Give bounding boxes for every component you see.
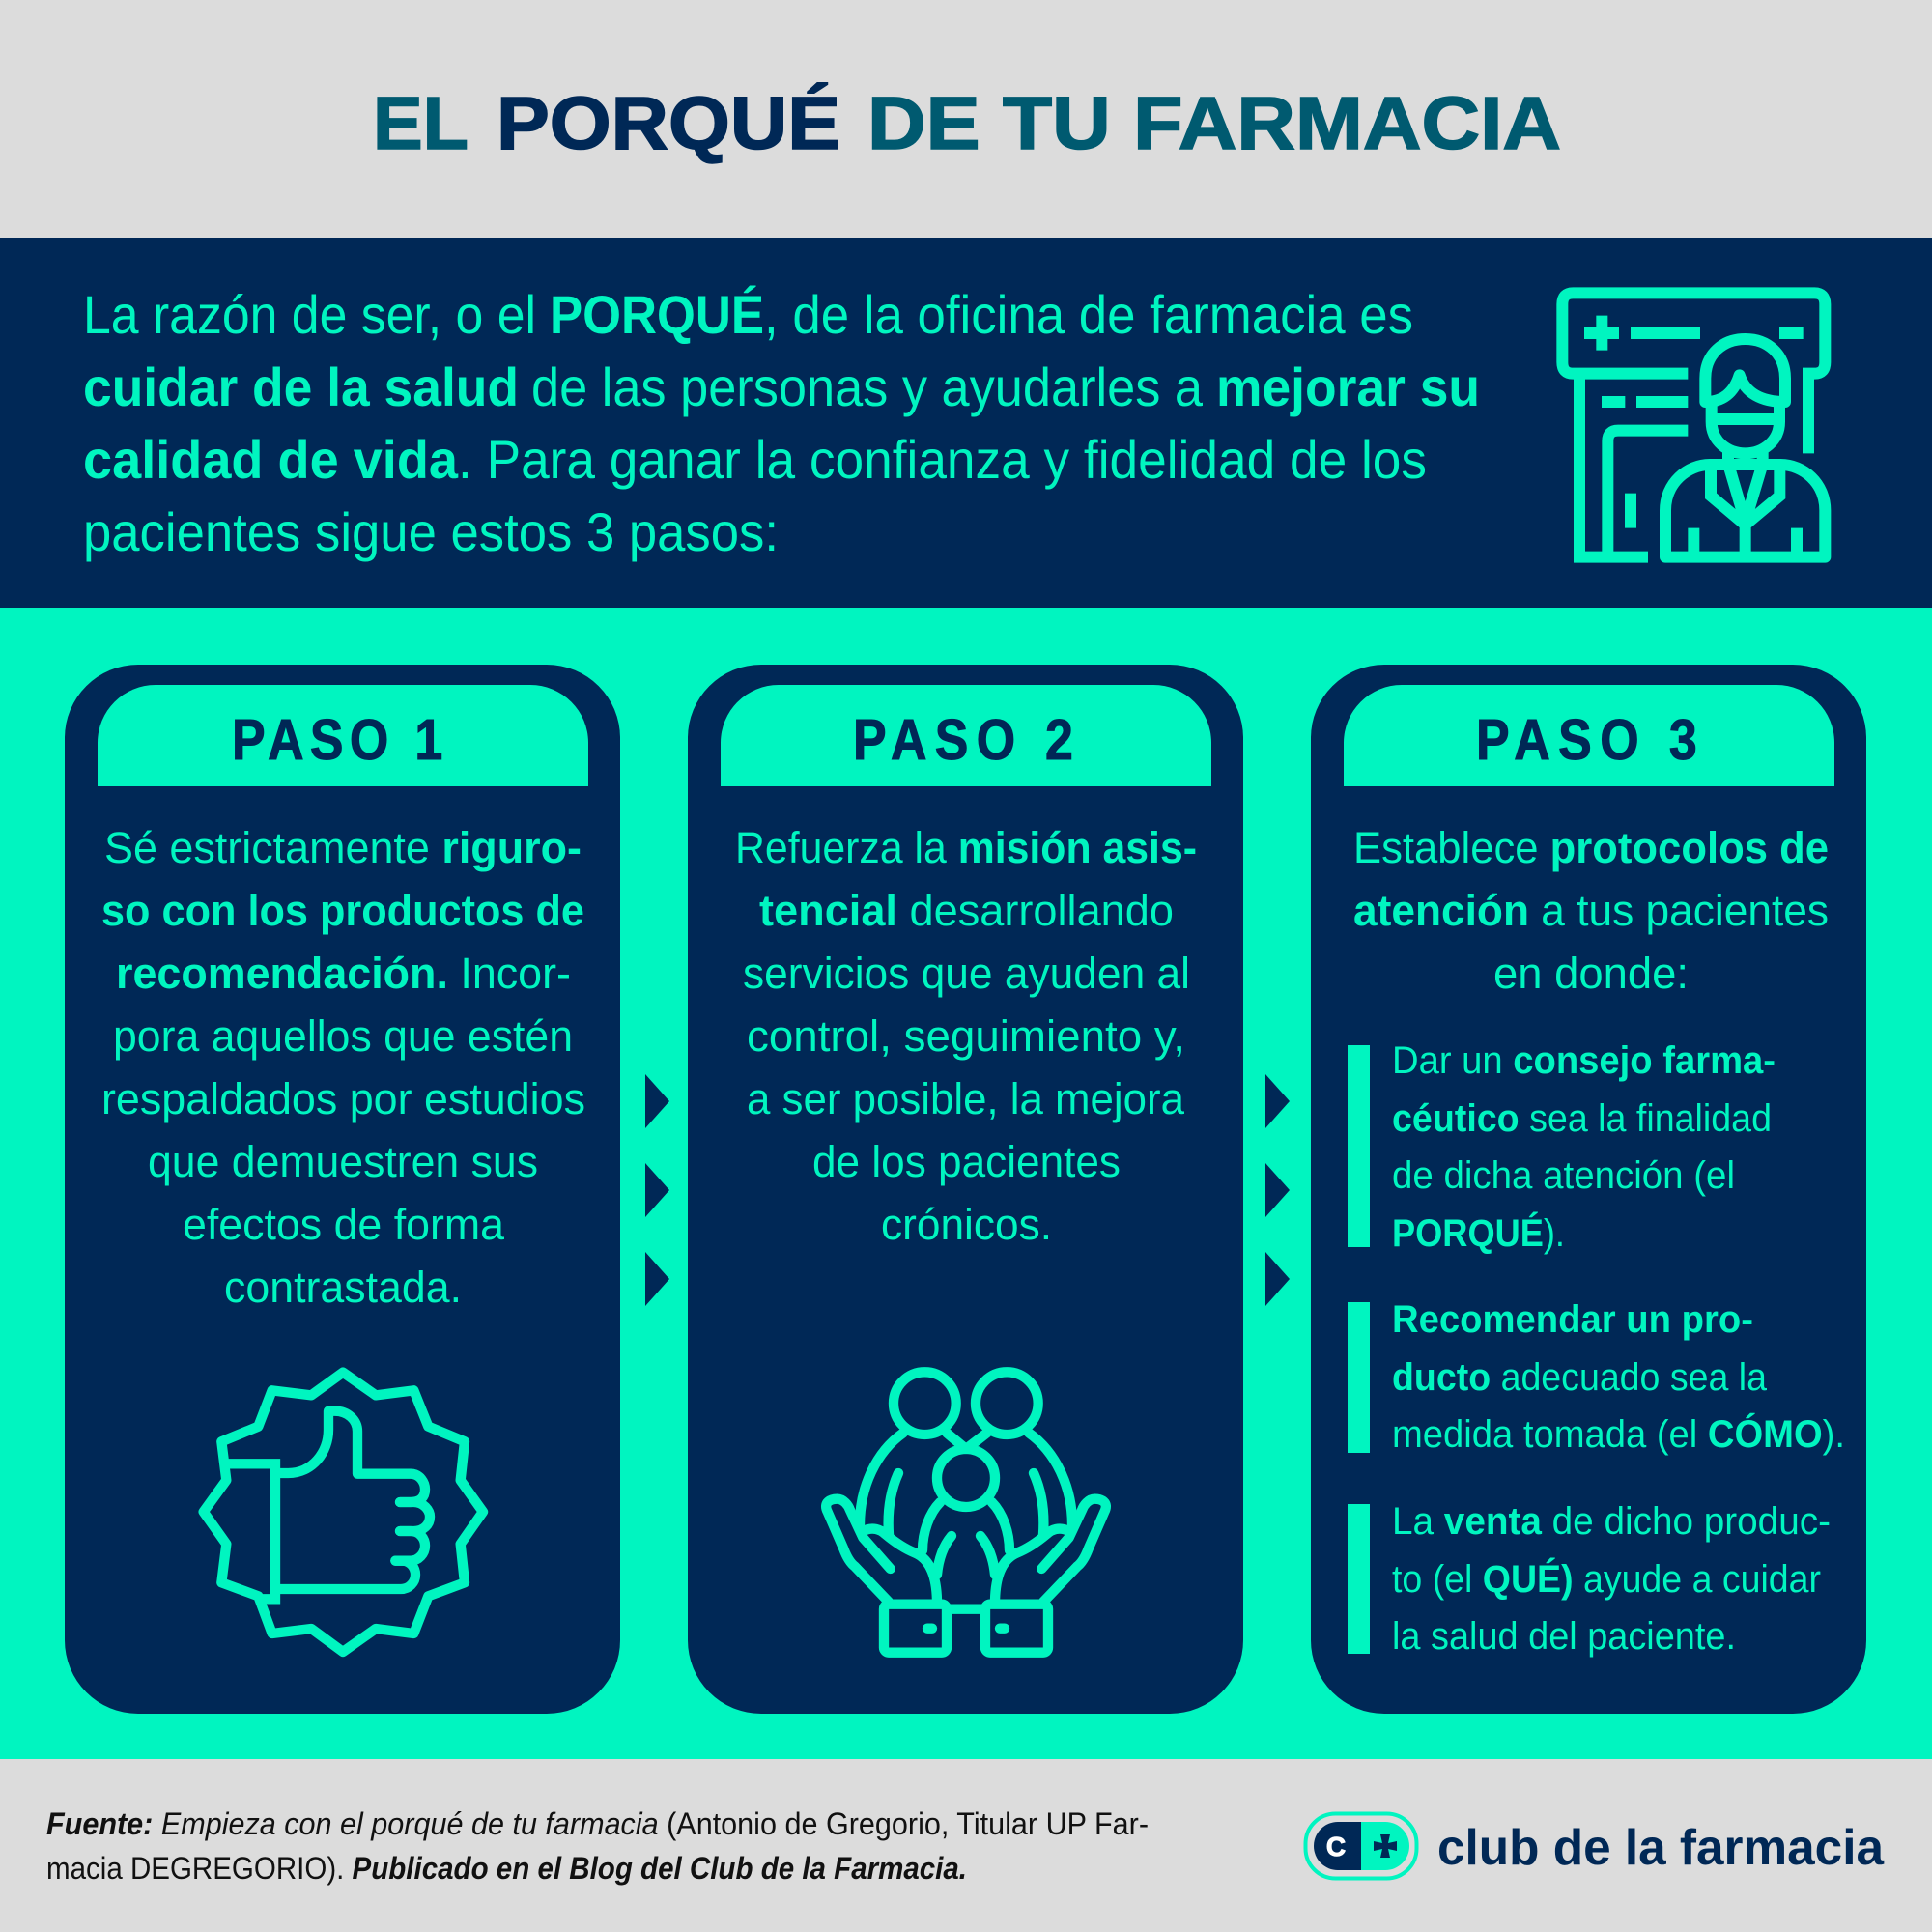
logo: club de la farmacia xyxy=(1306,1814,1885,1878)
paso 2 text: control, seguimiento y, xyxy=(747,1011,1185,1061)
bullet bar 3 xyxy=(1348,1504,1370,1654)
bullet 3 text: La venta de dicho produc- xyxy=(1392,1500,1831,1543)
paso 1 text: que demuestren sus xyxy=(148,1137,538,1186)
paso 3 intro text: en donde: xyxy=(1493,949,1689,998)
header band xyxy=(0,0,1932,238)
paso 2 tab xyxy=(721,685,1211,786)
paso 1 text: respaldados por estudios xyxy=(101,1074,585,1123)
bullet 2 text xyxy=(1392,1298,1845,1456)
icon: thumbs up badge xyxy=(204,1373,483,1652)
paso 1 text: efectos de forma xyxy=(183,1200,505,1249)
logo pill: C xyxy=(1326,1832,1346,1861)
paso 2 text: crónicos. xyxy=(881,1200,1052,1249)
paso 1 heading: PASO 1 xyxy=(232,708,442,772)
paso 1 text: recomendación. Incor- xyxy=(116,949,571,998)
paso 3 tab xyxy=(1344,685,1834,786)
paso 1 tab xyxy=(98,685,588,786)
paso 3 heading: PASO 3 xyxy=(1476,708,1697,772)
bullet 1 text: céutico sea la finalidad xyxy=(1392,1097,1772,1140)
source text xyxy=(46,1806,1149,1886)
paso 1 text: Sé estrictamente riguro- xyxy=(104,823,582,872)
title xyxy=(373,82,1561,165)
steps band xyxy=(0,608,1932,1759)
paso 1 text: pora aquellos que estén xyxy=(113,1011,573,1061)
bullet 3 text: la salud del paciente. xyxy=(1392,1615,1736,1658)
paso 2 text: Refuerza la misión asis- xyxy=(735,823,1197,872)
paso 3 intro text xyxy=(1353,823,1829,998)
bullet 2 text: medida tomada (el CÓMO). xyxy=(1392,1411,1845,1456)
intro text: calidad de vida xyxy=(83,429,459,490)
footer band xyxy=(0,1759,1932,1932)
intro text: pacientes sigue estos 3 pasos: xyxy=(83,501,779,562)
intro text: , de la oficina de farmacia es xyxy=(764,284,1413,345)
bullet 2 text: ducto adecuado sea la xyxy=(1392,1356,1768,1399)
intro text: PORQUÉ xyxy=(550,284,764,345)
bullet 1 text: de dicha atención (el xyxy=(1392,1154,1735,1197)
title: PORQUÉ xyxy=(497,82,840,165)
bullet bar 1 xyxy=(1348,1045,1370,1247)
source text: macia DEGREGORIO). Publicado en el Blog del Club de la Farmacia. xyxy=(46,1851,967,1886)
icon: pharmacist at pharmacy xyxy=(1562,293,1825,557)
paso 1 text: contrastada. xyxy=(224,1263,462,1312)
intro text: de las personas y ayudarles a xyxy=(531,356,1204,417)
bullet 2 text: Recomendar un pro- xyxy=(1392,1298,1753,1341)
bullet 1 text xyxy=(1392,1039,1776,1255)
paso 3 intro text: atención a tus pacientes xyxy=(1353,886,1829,935)
intro text: mejorar su xyxy=(1216,356,1480,417)
bullet 3 text: to (el QUÉ) ayude a cuidar xyxy=(1392,1557,1821,1601)
intro text: cuidar de la salud xyxy=(83,356,519,417)
paso 2 text: a ser posible, la mejora xyxy=(747,1074,1185,1123)
panel 1 background xyxy=(65,665,620,1714)
panel: paso 2 xyxy=(688,665,1243,1714)
paso 1 text: so con los productos de xyxy=(101,886,584,935)
panel: paso 3 xyxy=(1311,665,1866,1714)
title: DE TU FARMACIA xyxy=(867,82,1561,165)
intro band xyxy=(0,238,1932,608)
paso 2 text: servicios que ayuden al xyxy=(743,949,1190,998)
title: EL xyxy=(373,82,469,165)
bullet 1 text: PORQUÉ). xyxy=(1392,1211,1565,1255)
logo pill xyxy=(1306,1814,1416,1878)
bullet 1 text: Dar un consejo farma- xyxy=(1392,1039,1776,1082)
paso 2 heading: PASO 2 xyxy=(853,708,1073,772)
paso 2 text: de los pacientes xyxy=(812,1137,1121,1186)
icon: family in caring hands xyxy=(826,1372,1106,1653)
logo wordmark: club de la farmacia xyxy=(1437,1820,1885,1876)
paso 2 text: tencial desarrollando xyxy=(759,886,1174,935)
intro text: . Para ganar la confianza y fidelidad de los xyxy=(458,429,1427,490)
bullet 3 text xyxy=(1392,1500,1831,1658)
source text: Fuente: Empieza con el porqué de tu farmacia (Antonio de Gregorio, Titular UP Far- xyxy=(46,1806,1149,1841)
intro text: La razón de ser, o el xyxy=(83,284,536,345)
paso 1 text xyxy=(101,823,585,1312)
panel 2 background xyxy=(688,665,1243,1714)
panel: paso 1 xyxy=(65,665,620,1714)
paso 2 text xyxy=(735,823,1197,1249)
panel 3 background xyxy=(1311,665,1866,1714)
bullet bar 2 xyxy=(1348,1302,1370,1453)
arrows between paso 1 and 2 xyxy=(645,1074,669,1306)
paso 3 intro text: Establece protocolos de xyxy=(1353,823,1829,872)
arrows between paso 2 and 3 xyxy=(1265,1074,1290,1306)
intro text xyxy=(83,284,1480,562)
